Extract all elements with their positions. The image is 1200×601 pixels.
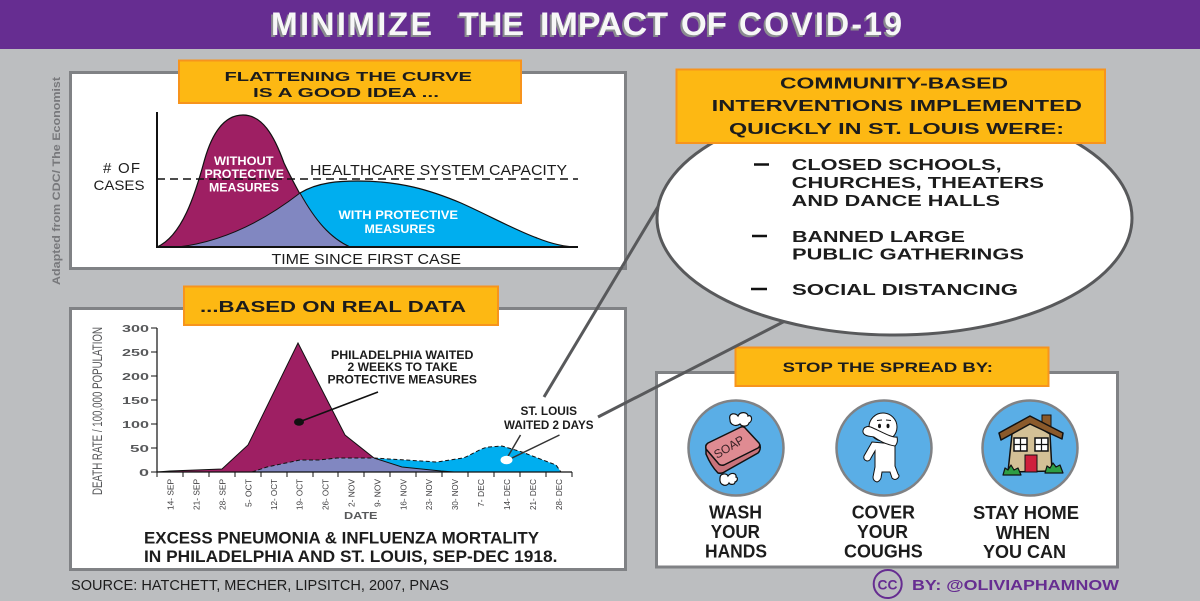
label: cover your coughs: COVER <box>852 502 915 522</box>
callout: Philadelphia: PROTECTIVE MEASURES <box>328 372 477 386</box>
curve: with protective measures <box>157 181 578 247</box>
label: wash your hands: WASH <box>709 502 762 522</box>
mortality area chart: 14- DEC <box>502 479 512 510</box>
label: cover your coughs: YOUR <box>857 522 908 542</box>
label: stay home when you can <box>973 503 1079 562</box>
title banner <box>0 0 1200 49</box>
heading: stop the spread: STOP THE SPREAD BY: <box>783 359 993 375</box>
curve chart: CASES <box>94 177 144 193</box>
mortality area chart: 9- NOV <box>372 479 382 507</box>
heading: based on real data <box>184 286 498 325</box>
panel: flattening the curve <box>70 60 626 268</box>
mortality area chart: 250 <box>122 347 149 359</box>
label: stay home when you can: YOU CAN <box>983 542 1066 562</box>
title banner: IMPACT <box>540 6 668 42</box>
mortality area chart: 5- OCT <box>244 479 254 507</box>
label: stay home when you can: STAY HOME <box>973 503 1079 523</box>
title banner: THE <box>459 6 524 42</box>
callout: Philadelphia: PHILADELPHIA WAITED <box>331 348 474 362</box>
text: banned gatherings <box>792 229 1024 264</box>
mortality area chart: 30- NOV <box>450 479 460 510</box>
area: Philadelphia <box>157 343 454 472</box>
curve chart: WITH PROTECTIVE <box>338 208 458 222</box>
text: closed schools: AND DANCE HALLS <box>792 193 1000 210</box>
title banner: OF <box>681 6 727 42</box>
mortality area chart: 12- OCT <box>269 479 279 510</box>
panel: real data <box>70 286 626 570</box>
curve chart: PROTECTIVE <box>204 167 284 181</box>
text: closed schools: CHURCHES, THEATERS <box>792 175 1044 192</box>
curve chart <box>94 112 578 268</box>
text: banned gatherings: PUBLIC GATHERINGS <box>792 246 1024 264</box>
heading: community-based interventions: COMMUNITY-BASED <box>780 76 1008 92</box>
area: overlap <box>252 458 454 472</box>
side credit: adapted from: Adapted from CDC/ The Economist <box>51 77 63 285</box>
mortality area chart: 2- NOV <box>346 479 356 507</box>
mortality area chart: 16- NOV <box>398 479 408 510</box>
callout: Philadelphia <box>294 348 477 426</box>
callout: Philadelphia: 2 WEEKS TO TAKE <box>348 360 458 374</box>
curve: without protective measures <box>157 115 350 247</box>
mortality area chart: 7- DEC <box>476 479 486 507</box>
mortality area chart: DATE <box>344 511 378 522</box>
heading: flattening the curve: FLATTENING THE CURVE <box>224 70 472 84</box>
label: cover your coughs <box>844 502 923 562</box>
label: wash your hands: HANDS <box>705 542 767 562</box>
credit: creative commons by line: CC <box>878 576 898 592</box>
mortality area chart: 21- DEC <box>528 479 538 510</box>
curve chart: MEASURES <box>364 222 435 236</box>
icon: soap <box>688 400 784 496</box>
panel: stop the spread <box>656 348 1118 567</box>
text: closed schools <box>792 157 1044 210</box>
chart caption <box>144 530 558 566</box>
heading: community-based interventions: QUICKLY IN ST. LOUIS WERE: <box>729 121 1064 138</box>
mortality area chart: 0 <box>139 467 149 479</box>
credit: creative commons by line <box>874 570 1120 598</box>
title banner: COVID-19 <box>739 6 902 42</box>
mortality area chart: 26- OCT <box>320 479 330 510</box>
curve overlap <box>178 193 350 247</box>
label: wash your hands: YOUR <box>711 522 760 542</box>
mortality area chart: 100 <box>122 419 149 431</box>
icon: cover coughs person <box>836 400 932 496</box>
mortality area chart: 50 <box>130 443 149 455</box>
source note: SOURCE: HATCHETT, MECHER, LIPSITCH, 2007, PNAS <box>71 578 449 594</box>
mortality area chart: 28- SEP <box>218 479 228 510</box>
mortality area chart: 150 <box>122 395 149 407</box>
curve chart: HEALTHCARE SYSTEM CAPACITY <box>310 162 567 179</box>
heading: stop the spread <box>736 348 1048 386</box>
mortality area chart: 28- DEC <box>554 479 564 510</box>
curve chart: MEASURES <box>209 180 279 194</box>
arrow: St. Louis line to ellipse (upper) <box>544 195 665 397</box>
arrow: St. Louis line to ellipse (lower) <box>598 321 785 417</box>
label: wash your hands <box>705 502 767 562</box>
text: banned gatherings: BANNED LARGE <box>792 229 965 246</box>
title banner: MINIMIZE <box>271 6 432 42</box>
label: stay home when you can: WHEN <box>996 523 1050 543</box>
mortality area chart <box>90 323 594 522</box>
heading: flattening the curve: IS A GOOD IDEA ... <box>253 86 439 100</box>
label: cover your coughs: COUGHS <box>844 542 923 562</box>
callout: St. Louis: WAITED 2 DAYS <box>504 418 594 432</box>
mortality area chart: 200 <box>122 371 149 383</box>
mortality area chart: 21- SEP <box>192 479 202 510</box>
heading: flattening the curve <box>179 60 521 103</box>
text: social distancing: SOCIAL DISTANCING <box>792 282 1018 299</box>
chart caption: IN PHILADELPHIA AND ST. LOUIS, SEP-DEC 1918. <box>144 548 558 566</box>
heading: community-based interventions <box>676 70 1105 143</box>
mortality area chart: 23- NOV <box>424 479 434 510</box>
mortality area chart: 14- SEP <box>166 479 176 510</box>
text: closed schools: CLOSED SCHOOLS, <box>792 157 1002 174</box>
curve chart: WITHOUT <box>214 154 274 168</box>
callout: St. Louis <box>500 404 594 464</box>
mortality area chart: DEATH RATE / 100,000 POPULATION <box>90 327 105 495</box>
curve chart: TIME SINCE FIRST CASE <box>272 251 461 268</box>
credit: creative commons by line: BY: @OLIVIAPHAMNOW <box>912 577 1120 594</box>
mortality area chart: 300 <box>122 323 149 335</box>
area: St. Louis <box>374 446 561 472</box>
heading: based on real data: ...BASED ON REAL DATA <box>200 299 466 316</box>
icon: house <box>982 400 1078 496</box>
icon: soap: SOAP <box>711 433 747 462</box>
heading: community-based interventions: INTERVENTIONS IMPLEMENTED <box>712 98 1082 115</box>
dash bullets <box>751 164 769 289</box>
chart caption: EXCESS PNEUMONIA & INFLUENZA MORTALITY <box>144 530 539 548</box>
callout: St. Louis: ST. LOUIS <box>520 404 577 418</box>
curve chart: # OF <box>103 160 140 177</box>
mortality area chart: 19- OCT <box>294 479 304 510</box>
panel: interventions ellipse <box>657 101 1132 335</box>
